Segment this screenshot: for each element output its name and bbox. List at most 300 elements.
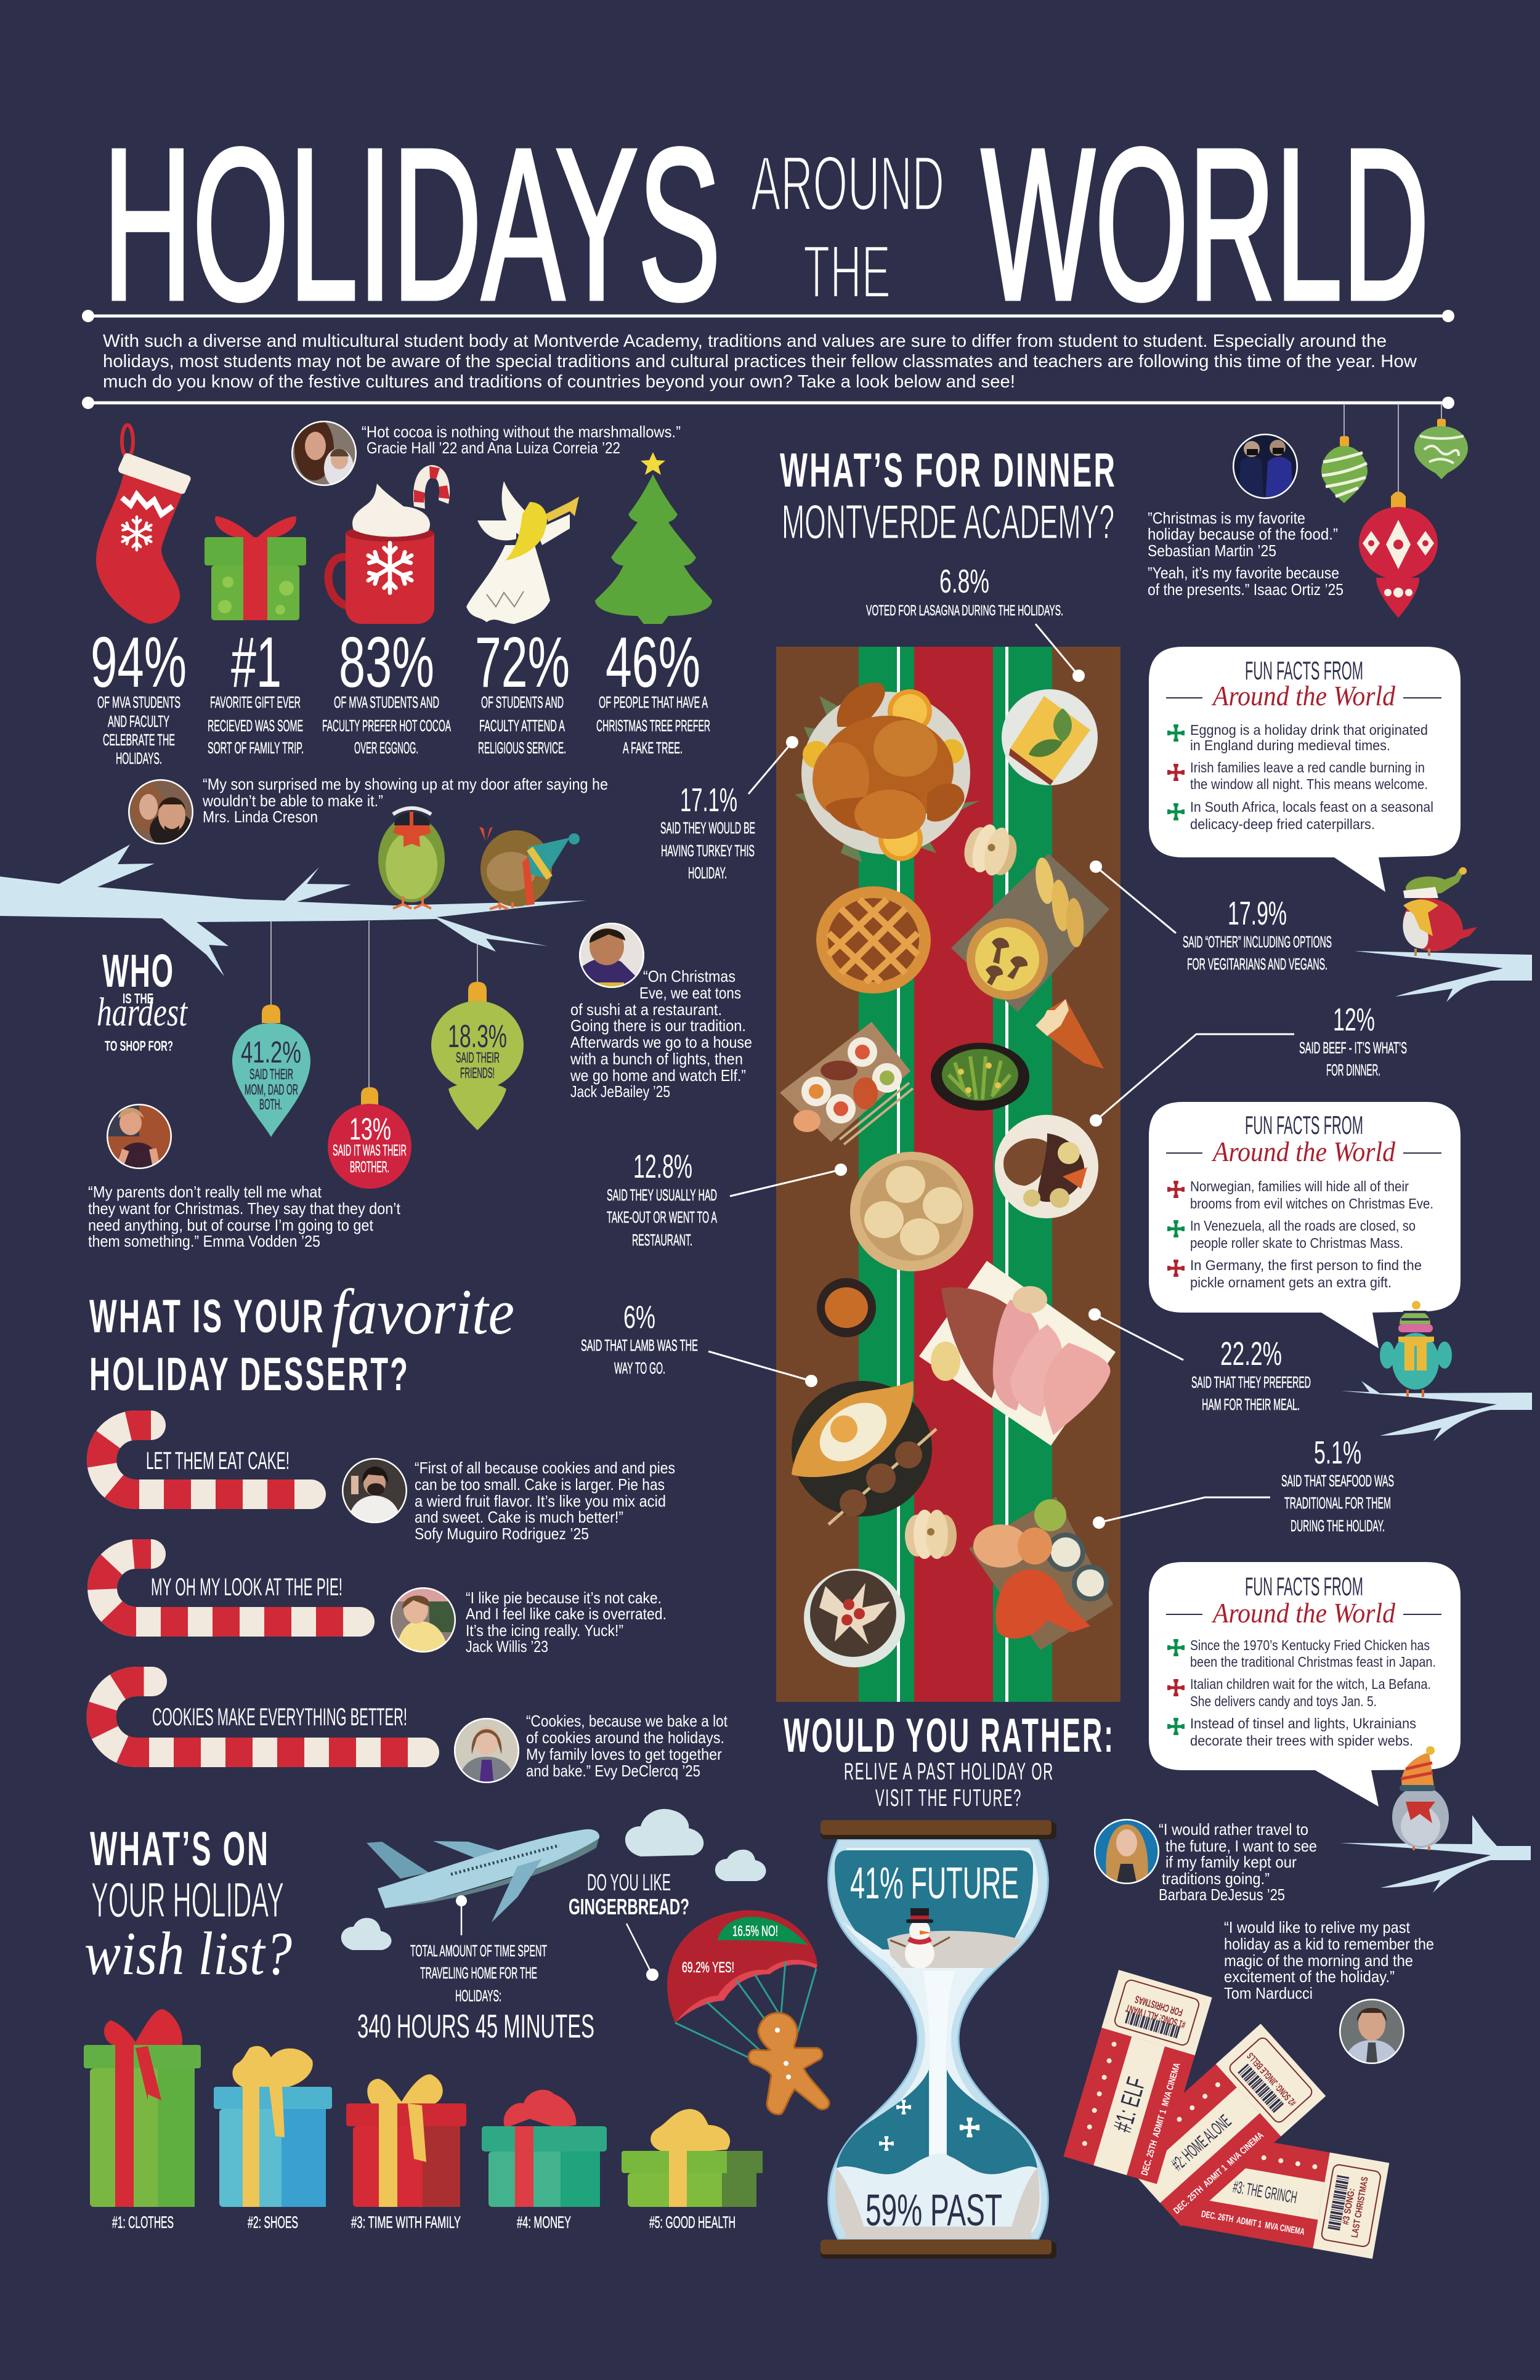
quote: Sofy Muguiro Rodriguez: “First of all because cookies and and pies (415, 1459, 675, 1477)
quote: Barbara DeJesus: traditions going.” (1162, 1869, 1270, 1888)
stat: 5.1% seafood: SAID THAT SEAFOOD WAS (1281, 1471, 1394, 1490)
fact: Japan KFC: Since the 1970’s Kentucky Fried Chicken has (1190, 1637, 1430, 1653)
stat: 94%: OF MVA STUDENTS (97, 693, 180, 711)
quote: Sofy Muguiro Rodriguez: Sofy Muguiro Rodriguez ’25 (415, 1524, 589, 1543)
quote: Jack JeBailey: “On Christmas (643, 967, 736, 986)
fact: Germany (1167, 1257, 1422, 1290)
photo: Tom Narducci (1335, 1994, 1409, 2068)
fact: La Befana (1167, 1676, 1431, 1709)
quote: Emma Vodden: “My parents don’t really tell me what (88, 1183, 322, 1201)
stat: 17.9% other: SAID “OTHER” INCLUDING OPTIONS (1183, 933, 1332, 951)
label: no: 16.5% NO! (732, 1923, 778, 1940)
icon: angel (466, 481, 579, 624)
photo: Emma Vodden (107, 1104, 172, 1169)
plank bottom (821, 2240, 1056, 2259)
stat: 72%: RELIGIOUS SERVICE. (478, 739, 566, 757)
stat: #1: #1 (231, 622, 282, 702)
icon: robin bird (1403, 867, 1477, 956)
photo: Sofy (342, 1458, 407, 1523)
icon: gingerbread parachute (667, 1910, 829, 2115)
gift: shoes (214, 2046, 332, 2207)
snow top (887, 1931, 1023, 1968)
stat: 72%: FACULTY ATTEND A (479, 716, 565, 735)
ticket: elf: #1 SONG: ALL I WANT (1124, 2002, 1187, 2031)
fact: Irish candle (1167, 759, 1428, 792)
stat: 12.8% takeout: RESTAURANT. (632, 1231, 692, 1249)
callout: gingerbread question: GINGERBREAD? (569, 1894, 689, 1919)
heading: who is the hardest: WHO (102, 945, 174, 997)
quote: Sebastian Martin and Isaac Ortiz: of the presents.” Isaac Ortiz ’25 (1148, 580, 1343, 599)
ticket: home alone: #2 SONG: JINGLE BELLS (1246, 2050, 1299, 2108)
fact: Irish candle: Irish families leave a red candle burning in (1190, 759, 1425, 775)
callout: beef leader (1090, 1034, 1294, 1127)
ticket: the grinch (1181, 2129, 1389, 2259)
stat: 12% beef: FOR DINNER. (1326, 1061, 1380, 1079)
stat: 46%: CHRISTMAS TREE PREFER (596, 716, 710, 735)
heading: favorite holiday dessert: WHAT IS YOUR (89, 1290, 325, 1343)
quote: Jack JeBailey (570, 918, 752, 1101)
heading: fun facts from: FUN FACTS FROM (1245, 1572, 1363, 1601)
candy cane: pie: MY OH MY LOOK AT THE PIE! (151, 1574, 342, 1601)
gift labels: #4: MONEY (517, 2213, 571, 2232)
title: AROUND (751, 141, 944, 227)
ornament: 41.2% mom dad or both (232, 921, 310, 1137)
quote: Jack JeBailey: Afterwards we go to a house (570, 1033, 752, 1051)
stat: 72%: 72% (475, 622, 570, 702)
snowflakes (879, 2100, 979, 2151)
quote: Emma Vodden: them something.” Emma Vodden ’25 (88, 1232, 320, 1250)
stat: 6% lamb (581, 1300, 698, 1377)
quote: Barbara DeJesus: “I would rather travel to (1159, 1820, 1308, 1839)
quote: Emma Vodden (88, 1099, 401, 1250)
candy cane: cake (102, 1425, 311, 1494)
fact: Germany: pickle ornament gets an extra gift. (1190, 1274, 1392, 1290)
ornament: 41.2% mom dad or both: BOTH. (259, 1096, 282, 1113)
panel: fun facts 2 (1149, 1102, 1461, 1348)
stat: 83%: 83% (339, 622, 434, 702)
heading: what's on your wish list: wish list? (84, 1919, 292, 1988)
stat: 72% (475, 622, 570, 757)
heading: around the world: Around the World (1211, 1136, 1396, 1167)
quote: Evy DeClercq: of cookies around the holidays. (526, 1728, 724, 1747)
heading: what's on your wish list (84, 1821, 292, 1988)
intro paragraph: much do you know of the festive cultures and traditions of countries beyond your own? Take a look below and see! (103, 372, 1015, 392)
icon: brown bird (479, 827, 580, 909)
callout: travel time: TOTAL AMOUNT OF TIME SPENT (410, 1941, 547, 1960)
icon: clouds (341, 1809, 766, 1950)
ticket: home alone: #2: HOME ALONE (1167, 2111, 1235, 2175)
food: lasagna (1002, 689, 1098, 785)
candy cane: cake: LET THEM EAT CAKE! (146, 1447, 290, 1475)
stat: 46%: OF PEOPLE THAT HAVE A (599, 693, 708, 711)
heading: around the world: Around the World (1211, 680, 1396, 711)
stat: lasagna 6.8%: VOTED FOR LASAGNA DURING THE HOLIDAYS. (866, 602, 1063, 619)
heading: favorite holiday dessert: HOLIDAY DESSERT? (89, 1348, 410, 1401)
heading: what's for dinner (780, 443, 1117, 549)
icon: stocking (96, 425, 191, 624)
fact: Japan KFC: been the traditional Christmas feast in Japan. (1190, 1654, 1436, 1670)
stat: 46% (596, 622, 710, 757)
food: sushi tray (780, 1022, 913, 1144)
ticket: elf: #1: ELF (1108, 2074, 1151, 2135)
callout: seafood leader (1093, 1497, 1270, 1529)
title: THE (803, 230, 891, 314)
stat: 17.1% turkey: SAID THEY WOULD BE (660, 819, 755, 837)
quote: Jack Willis: It’s the icing really. Yuck!” (466, 1621, 623, 1640)
stat: 83%: OF MVA STUDENTS AND (334, 693, 439, 711)
hourglass (821, 1820, 1056, 2259)
stat: 5.1% seafood: 5.1% (1314, 1435, 1361, 1471)
gift labels: #3: TIME WITH FAMILY (351, 2213, 461, 2232)
teal bottom (837, 2070, 1037, 2174)
heading: what's for dinner: MONTVERDE ACADEMY? (782, 495, 1114, 549)
stat: 12.8% takeout: SAID THEY USUALLY HAD (607, 1186, 717, 1204)
icon: green gift (205, 516, 306, 620)
food: pumpkin top (960, 819, 1022, 880)
food: lattice pie (816, 886, 931, 994)
fact: Venezuela: people roller skate to Christmas Mass. (1190, 1235, 1403, 1251)
quote: Evy DeClercq: “Cookies, because we bake a lot (526, 1712, 728, 1730)
icon: grey bird (1392, 1746, 1449, 1850)
quote: Linda Creson: “My son surprised me by showing up at my door after saying he (203, 775, 608, 793)
stat: 17.9% other (1183, 895, 1332, 973)
stat: 94%: AND FACULTY (108, 712, 169, 731)
stat: 94%: CELEBRATE THE (103, 731, 175, 749)
stat: lasagna 6.8%: 6.8% (939, 563, 989, 600)
food: steak plate (995, 1115, 1098, 1218)
quote: Jack JeBailey: Jack JeBailey ’25 (570, 1082, 670, 1101)
photo: Evy DeClercq (454, 1718, 519, 1783)
quote: Gracie Hall and Ana Luiza Correia (291, 421, 680, 486)
quote: Jack Willis: Jack Willis ’23 (466, 1637, 548, 1656)
heading: fun facts from: FUN FACTS FROM (1245, 656, 1363, 685)
quote: Tom Narducci: Tom Narducci (1224, 1984, 1313, 2002)
stat: 22.2% ham: 22.2% (1220, 1335, 1282, 1372)
ornament: 18.3% friends: SAID THEIR (456, 1050, 500, 1066)
callout: lasagna leader (1035, 624, 1085, 682)
divider rule top (82, 310, 1454, 322)
quote: Evy DeClercq: and bake.” Evy DeClercq ’25 (526, 1762, 700, 1780)
ornament: 41.2% mom dad or both: MOM, DAD OR (245, 1082, 298, 1098)
teal top (835, 1850, 1033, 1949)
fact: Norway brooms: Norwegian, families will hide all of their (1190, 1178, 1409, 1194)
quote: Sofy Muguiro Rodriguez: and sweet. Cake is much better!” (415, 1508, 623, 1526)
heading: what's for dinner: WHAT’S FOR DINNER (780, 443, 1117, 497)
stat: 46%: 46% (606, 622, 700, 702)
ticket: elf (1063, 1970, 1212, 2184)
label: yes: 69.2% YES! (682, 1959, 734, 1976)
quote: Barbara DeJesus: the future, I want to see (1165, 1837, 1317, 1855)
fact: Norway brooms: brooms from evil witches on Christmas Eve. (1190, 1196, 1433, 1212)
gift: clothes (84, 2009, 201, 2207)
ornament: 13% brother: BROTHER. (350, 1159, 389, 1176)
quote: Barbara DeJesus: if my family kept our (1165, 1853, 1297, 1871)
quote: Jack Willis: “I like pie because it’s not cake. (466, 1589, 662, 1607)
stat: 17.1% turkey: HAVING TURKEY THIS (661, 841, 755, 860)
fact: Venezuela: In Venezuela, all the roads are closed, so (1190, 1218, 1416, 1234)
heading: favorite holiday dessert (89, 1276, 514, 1401)
fact: South Africa: In South Africa, locals feast on a seasonal (1190, 799, 1433, 815)
stat: 22.2% ham (1191, 1335, 1311, 1414)
label: 59% past: 59% PAST (865, 2186, 1002, 2235)
stat: 12% beef: 12% (1333, 1002, 1375, 1038)
stat: 5.1% seafood: TRADITIONAL FOR THEM (1284, 1494, 1391, 1512)
stat: 17.9% other: FOR VEGITARIANS AND VEGANS. (1187, 955, 1327, 973)
fact: Ukraine: decorate their trees with spider webs. (1190, 1733, 1413, 1749)
quote: Tom Narducci (1224, 1918, 1434, 2068)
stat: 83%: OVER EGGNOG. (354, 739, 418, 757)
gift labels: #2: SHOES (248, 2213, 298, 2232)
panel: fun facts 1 (1149, 647, 1461, 892)
stat: 12.8% takeout (607, 1148, 717, 1249)
intro paragraph (103, 331, 1417, 392)
icon: cocoa mug (328, 465, 450, 624)
quote: Barbara DeJesus: Barbara DeJesus ’25 (1159, 1885, 1285, 1904)
heading: would you rather: RELIVE A PAST HOLIDAY OR (844, 1759, 1054, 1785)
food: pumpkin lower (905, 1510, 957, 1559)
callout: gingerbread question (569, 1870, 689, 1981)
sand base (845, 2227, 1031, 2239)
quote: Sebastian Martin and Isaac Ortiz (1148, 429, 1343, 599)
stat: 17.1% turkey: 17.1% (680, 782, 737, 819)
branch left (0, 844, 586, 976)
ticket: the grinch: LAST CHRISTMAS (1350, 2176, 1371, 2238)
stat: lasagna 6.8% (866, 563, 1063, 619)
ornament: green striped (1321, 436, 1368, 503)
quote: Tom Narducci: excitement of the holiday.” (1224, 1967, 1395, 1986)
fact: Norway brooms (1167, 1178, 1433, 1212)
heading: who is the hardest: hardest (97, 990, 188, 1035)
quote: Gracie Hall and Ana Luiza Correia: “Hot cocoa is nothing without the marshmallows.” (362, 423, 681, 441)
quote: Evy DeClercq (454, 1715, 727, 1783)
label: 41% future: 41% FUTURE (850, 1859, 1019, 1908)
fact: South Africa: delicacy-deep fried caterpillars. (1190, 816, 1375, 832)
stat: 12% beef (1299, 1002, 1407, 1079)
divider rule bottom (82, 397, 1454, 409)
callout: other leader (1090, 860, 1176, 933)
stat: 17.1% turkey: HOLIDAY. (688, 864, 727, 882)
stat: 5.1% seafood: DURING THE HOLIDAY. (1291, 1516, 1385, 1535)
photo: Gracie and Ana (291, 421, 357, 486)
food: ham platter (919, 1261, 1116, 1446)
branch right 2 (1341, 1381, 1532, 1441)
quote: Tom Narducci: magic of the morning and the (1224, 1951, 1413, 1970)
stat: 83%: FACULTY PREFER HOT COCOA (322, 716, 451, 735)
food: green bean bowl (931, 1043, 1029, 1111)
ornaments top right (1321, 403, 1468, 618)
quote: Emma Vodden: they want for Christmas. They say that they don’t (88, 1199, 401, 1218)
stat: 12.8% takeout: TAKE-OUT OR WENT TO A (607, 1208, 717, 1226)
stream of snow (923, 1971, 955, 2168)
quote: Sofy Muguiro Rodriguez: can be too small. Cake is larger. Pie has (415, 1475, 665, 1494)
icon: airplane (367, 1829, 599, 1922)
candy cane: cookies: COOKIES MAKE EVERYTHING BETTER! (152, 1704, 407, 1731)
food: seafood board (969, 1497, 1113, 1650)
quote: Linda Creson (128, 778, 607, 844)
icon: teal bird (1380, 1301, 1452, 1397)
heading: would you rather: WOULD YOU RATHER: (784, 1708, 1115, 1762)
ticket: home alone: DEC. 25TH ADMIT 1 MVA CINEMA (1172, 2130, 1266, 2216)
stat: 6% lamb: SAID THAT LAMB WAS THE (581, 1336, 698, 1354)
icon: snowman (890, 1908, 950, 1969)
stat: #1: SORT OF FAMILY TRIP. (208, 739, 304, 757)
quote: Jack JeBailey: we go home and watch Elf.” (570, 1066, 746, 1085)
sand sides (835, 2168, 1040, 2233)
panel: fun facts 3 (1149, 1562, 1461, 1807)
gift: money (482, 2090, 607, 2207)
ornament: red with diamonds (1359, 492, 1438, 618)
stat: 12% beef: SAID BEEF - IT’S WHAT’S (1299, 1038, 1407, 1057)
quote: Jack JeBailey: Going there is our tradition. (570, 1016, 746, 1035)
intro paragraph: With such a diverse and multicultural student body at Montverde Academy, traditions and values are sure to differ from student to student. Especially around the (103, 331, 1387, 351)
photo: Sebastian and Isaac (1233, 434, 1298, 499)
quote: Jack JeBailey: of sushi at a restaurant. (570, 1000, 722, 1019)
stat: 83% (322, 622, 451, 757)
heading: what's on your wish list: YOUR HOLIDAY (91, 1872, 284, 1927)
stat: 72%: OF STUDENTS AND (481, 693, 564, 711)
stat: 6% lamb: 6% (623, 1300, 655, 1335)
stat: 46%: A FAKE TREE. (623, 739, 683, 757)
ornament: 13% brother: SAID IT WAS THEIR (333, 1142, 407, 1159)
callout: gingerbread question: DO YOU LIKE (587, 1870, 671, 1896)
photo: Jack JeBailey (579, 923, 644, 988)
fact: Irish candle: the window all night. This means welcome. (1190, 776, 1428, 792)
ornament: 41.2% mom dad or both: SAID THEIR (249, 1066, 293, 1083)
candy cane: pie (102, 1554, 360, 1622)
glass inner (838, 1848, 1038, 2233)
title: HOLIDAYS (103, 104, 721, 345)
quote: Linda Creson: wouldn’t be able to make it.” (202, 791, 383, 810)
callout: ham leader (1088, 1308, 1183, 1360)
quote: Jack Willis (391, 1587, 665, 1653)
callout: turkey leader (748, 736, 798, 794)
stat: 12.8% takeout: 12.8% (633, 1148, 692, 1185)
heading: would you rather: VISIT THE FUTURE? (875, 1785, 1022, 1811)
fact: Japan KFC (1167, 1637, 1436, 1670)
fact: Ukraine: Instead of tinsel and lights, Ukrainians (1190, 1715, 1416, 1731)
fact: Ukraine (1167, 1715, 1416, 1749)
stat: 94% (91, 622, 187, 767)
quote: Jack Willis: And I feel like cake is overrated. (466, 1605, 667, 1623)
ornament: 18.3% friends: 18.3% (448, 1019, 507, 1054)
ornament: 41.2% mom dad or both: 41.2% (241, 1036, 301, 1069)
stat: 6% lamb: WAY TO GO. (614, 1359, 665, 1377)
quote: Tom Narducci: holiday as a kid to remember the (1224, 1935, 1434, 1953)
heading: fun facts from: FUN FACTS FROM (1245, 1111, 1363, 1139)
stat: #1: RECIEVED WAS SOME (208, 716, 303, 735)
table runner background (776, 647, 1121, 1702)
ticket: elf: DEC. 25TH ADMIT 1 MVA CINEMA (1139, 2062, 1183, 2177)
gift labels: #1: CLOTHES (112, 2213, 174, 2232)
plank top (821, 1820, 1056, 1839)
stat: 94%: 94% (91, 622, 187, 702)
fact: eggnog: Eggnog is a holiday drink that originated (1190, 722, 1428, 738)
heading: who is the hardest: TO SHOP FOR? (105, 1038, 173, 1054)
stat: 22.2% ham: HAM FOR THEIR MEAL. (1202, 1395, 1300, 1414)
fact: Germany: In Germany, the first person to find the (1190, 1257, 1422, 1273)
fact: eggnog: in England during medieval times. (1190, 737, 1390, 753)
snow drift left (843, 1922, 912, 1977)
food: small pecan bowl (817, 1278, 876, 1337)
ornament: 13% brother (328, 921, 411, 1189)
ornament: 13% brother: 13% (349, 1112, 391, 1146)
stat: 5.1% seafood (1281, 1435, 1394, 1535)
quote: Sofy Muguiro Rodriguez (338, 1454, 675, 1543)
fact: Venezuela (1167, 1218, 1416, 1251)
candy cane: cookies (101, 1682, 424, 1752)
heading: who is the hardest: IS THE (123, 990, 153, 1006)
heading: would you rather (784, 1708, 1115, 1811)
ticket: elf: FOR CHRISTMAS (1133, 1993, 1184, 2018)
food: chocolate cake (804, 1569, 905, 1667)
icon: green bird (378, 808, 445, 909)
ticket: the grinch: DEC. 26TH ADMIT 1 MVA CINEMA (1201, 2209, 1305, 2237)
stat: 17.1% turkey (660, 782, 755, 882)
ornament: 18.3% friends: FRIENDS! (460, 1065, 495, 1082)
stat: #1 (208, 622, 304, 757)
fact: eggnog (1167, 722, 1428, 753)
ornament: green swirl (1414, 419, 1468, 479)
gingerbread man (748, 2013, 829, 2115)
quote: Evy DeClercq: My family loves to get together (526, 1745, 722, 1763)
heading: favorite holiday dessert: favorite (331, 1276, 514, 1348)
heading: what's on your wish list: WHAT’S ON (90, 1821, 270, 1876)
quote: Sebastian Martin and Isaac Ortiz: Sebastian Martin ’25 (1148, 541, 1276, 560)
gift labels (112, 2213, 736, 2232)
quote: Jack JeBailey: Eve, we eat tons (639, 984, 741, 1002)
callout: lamb leader (708, 1351, 817, 1387)
stat: 17.9% other: 17.9% (1228, 895, 1287, 932)
quote: Tom Narducci: “I would like to relive my past (1224, 1918, 1411, 1937)
photo: Linda Creson (128, 779, 193, 844)
fact: La Befana: Italian children wait for the witch, La Befana. (1190, 1676, 1431, 1692)
branch right 1 (1355, 951, 1532, 1002)
callout: takeout leader (730, 1164, 847, 1196)
food: mushroom quiche tray (951, 854, 1109, 1012)
icon: Christmas tree (595, 452, 712, 624)
fact: La Befana: She delivers candy and toys Jan. 5. (1190, 1693, 1377, 1709)
quote: Gracie Hall and Ana Luiza Correia: Gracie Hall ’22 and Ana Luiza Correia ’22 (367, 439, 620, 457)
callout: travel time: HOLIDAYS: (455, 1986, 501, 2005)
photo: Jack Willis (391, 1587, 456, 1653)
snow bottom (835, 2153, 1041, 2233)
ticket: the grinch: #3 SONG: (1340, 2187, 1357, 2225)
intro paragraph: holidays, most students may not be aware of the special traditions and cultural practices their fellow classmates and teachers are following this time of the year. How (103, 352, 1417, 371)
callout: travel time: TRAVELING HOME FOR THE (420, 1964, 537, 1982)
gift labels: #5: GOOD HEALTH (649, 2213, 736, 2232)
quote: Sofy Muguiro Rodriguez: a wierd fruit flavor. It’s like you mix acid (415, 1492, 666, 1510)
glass outline (829, 1839, 1048, 2240)
callout: travel time (357, 1895, 594, 2045)
stat: 94%: HOLIDAYS. (116, 749, 162, 767)
quote: Jack JeBailey: with a bunch of lights, then (570, 1050, 743, 1068)
branch right 3 (1340, 1815, 1531, 1893)
heading: around the world: Around the World (1211, 1597, 1396, 1629)
food: roast turkey (795, 682, 979, 862)
quote: Barbara DeJesus (1094, 1819, 1316, 1901)
quote: Sebastian Martin and Isaac Ortiz: holiday because of the food.” (1148, 525, 1338, 543)
food: khachapuri and skewer plate (792, 1381, 936, 1524)
quote: Linda Creson: Mrs. Linda Creson (203, 808, 318, 826)
quote: Emma Vodden: need anything, but of course I’m going to get (88, 1216, 374, 1234)
stat: #1: FAVORITE GIFT EVER (210, 693, 301, 711)
quote: Sebastian Martin and Isaac Ortiz: ”Yeah, it’s my favorite because (1148, 564, 1339, 582)
stat: 22.2% ham: SAID THAT THEY PREFERED (1191, 1373, 1311, 1391)
gift: time with family (346, 2074, 466, 2207)
food: dumpling steamer (850, 1152, 973, 1271)
callout: travel time: 340 HOURS 45 MINUTES (357, 2008, 594, 2045)
food: pie slice (1035, 999, 1104, 1069)
